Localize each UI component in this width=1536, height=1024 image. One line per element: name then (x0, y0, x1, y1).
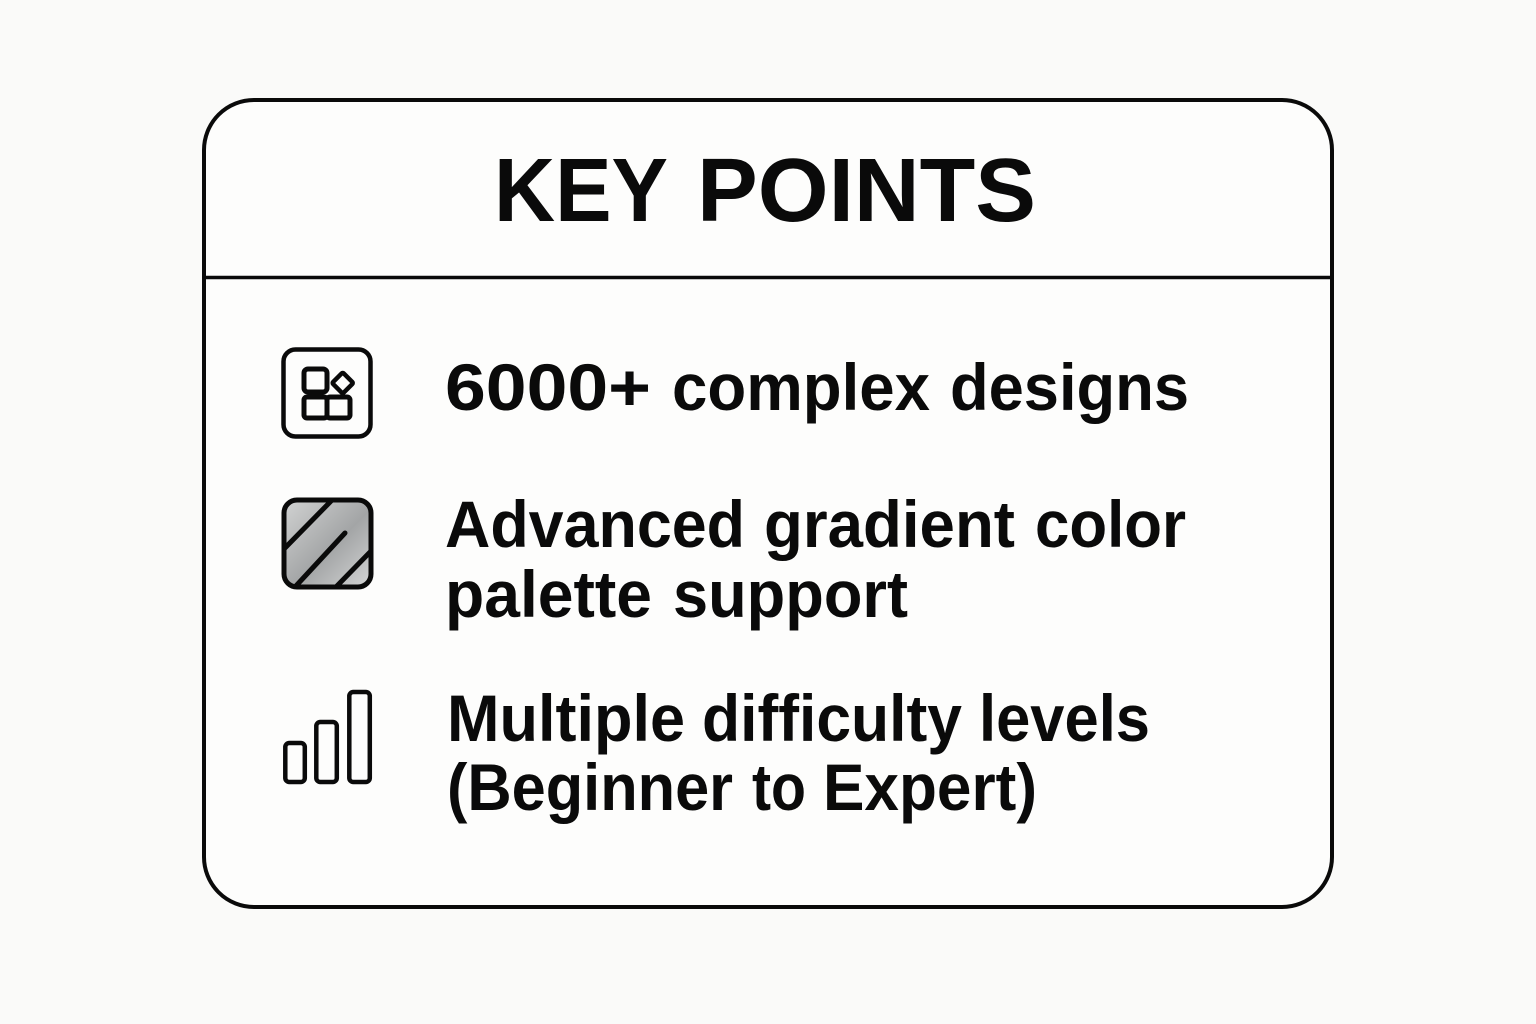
text: Multiple difficulty levels (Beginner to Expert): Expert) (823, 750, 1037, 824)
text: 6000+ complex designs: 6000+ (445, 350, 651, 424)
title: POINTS (697, 141, 1036, 241)
header divider (205, 276, 1331, 279)
text: Advanced gradient color palette support: color (1035, 487, 1186, 561)
text: Multiple difficulty levels (Beginner to Expert) (447, 681, 1150, 824)
text: Multiple difficulty levels (Beginner to Expert): levels (979, 681, 1150, 755)
text: Multiple difficulty levels (Beginner to Expert): to (752, 750, 806, 824)
text: Multiple difficulty levels (Beginner to Expert): (Beginner (447, 750, 733, 824)
text: 6000+ complex designs (445, 350, 1189, 424)
text: Advanced gradient color palette support: gradient (764, 487, 1015, 561)
title: KEY (494, 141, 668, 241)
text: Advanced gradient color palette support (445, 487, 1186, 631)
text: Advanced gradient color palette support: support (673, 557, 908, 631)
text: Multiple difficulty levels (Beginner to Expert): Multiple (447, 681, 685, 755)
icon: shapes grid (284, 350, 370, 436)
list item: difficulty levels (285, 681, 1150, 824)
list item: gradient palette (284, 487, 1186, 631)
icon: ascending bars (285, 692, 370, 782)
title (494, 141, 1036, 241)
panel: key points card (204, 100, 1332, 907)
text: 6000+ complex designs: designs (950, 350, 1189, 424)
text: Advanced gradient color palette support: palette (445, 557, 652, 631)
text: 6000+ complex designs: complex (672, 350, 930, 424)
text: Advanced gradient color palette support: Advanced (445, 487, 745, 561)
text: Multiple difficulty levels (Beginner to Expert): difficulty (702, 681, 962, 755)
list item: complex designs (284, 350, 1189, 436)
icon: gradient swatch (284, 498, 373, 589)
